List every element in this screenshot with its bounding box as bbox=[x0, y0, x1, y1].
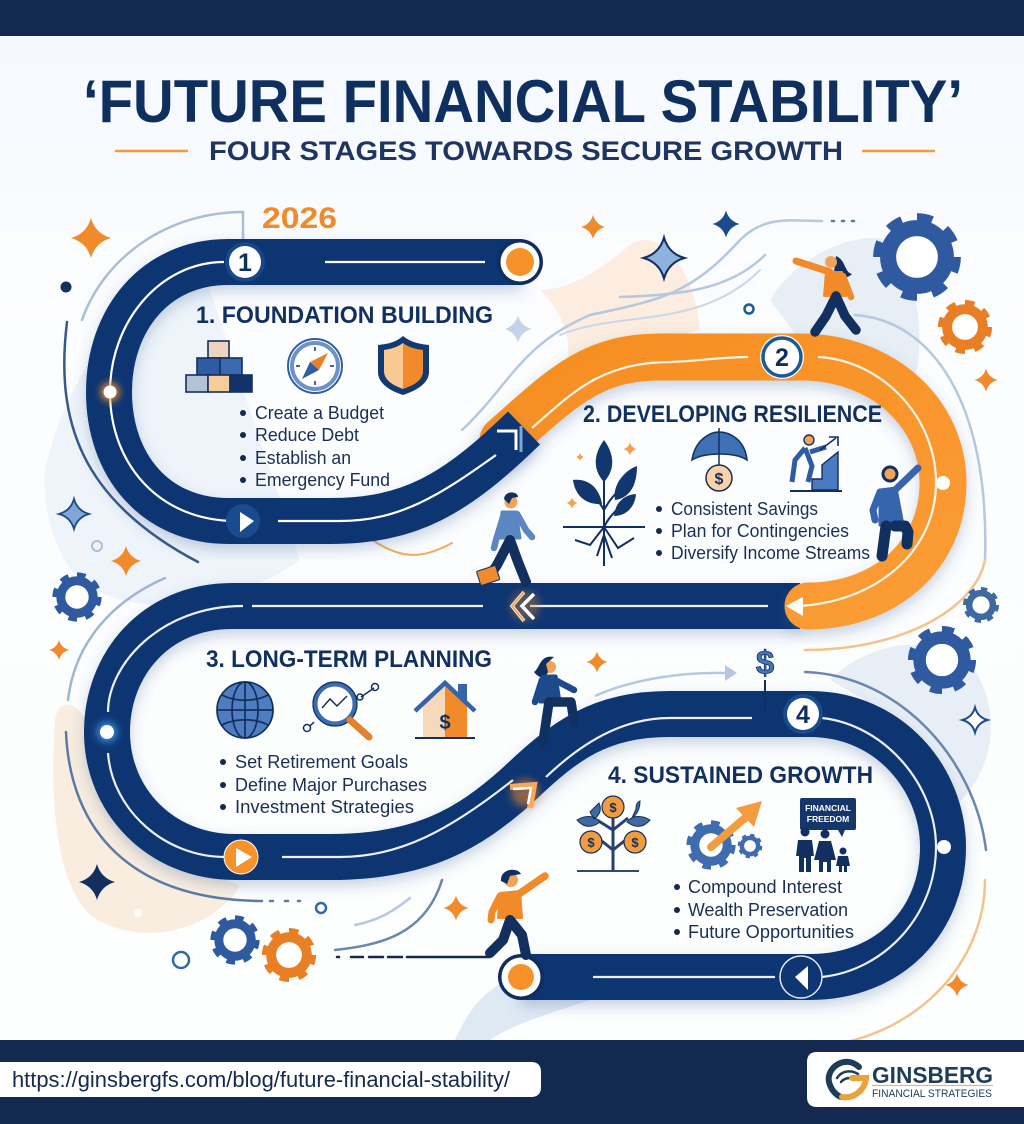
bullet list: stage 3 bbox=[220, 752, 427, 817]
top band bbox=[0, 0, 1024, 36]
gears bbox=[56, 220, 996, 978]
bottom band bbox=[0, 1040, 1024, 1124]
heading: 2026: 2026 bbox=[262, 202, 337, 235]
heading: stage 3: 3. LONG-TERM PLANNING bbox=[206, 646, 492, 673]
title: ‘FUTURE FINANCIAL STABILITY’ bbox=[83, 68, 963, 135]
bullet list: stage 2 bbox=[656, 499, 870, 563]
icon: house with dollar: $ bbox=[439, 712, 451, 734]
url pill: https://ginsbergfs.com/blog/future-financial-stability/ bbox=[12, 1067, 511, 1092]
bullet list: stage 1: Establish an bbox=[255, 448, 351, 468]
stage 1 content bbox=[186, 302, 493, 490]
bullet list: stage 3: Define Major Purchases bbox=[235, 775, 427, 795]
icon: umbrella with dollar: $ bbox=[715, 471, 724, 488]
bullet list: stage 4: Future Opportunities bbox=[688, 922, 854, 942]
subtitle: FOUR STAGES TOWARDS SECURE GROWTH bbox=[209, 136, 843, 166]
play arrow marker bbox=[226, 504, 260, 538]
bullet list: stage 4: Wealth Preservation bbox=[688, 900, 848, 920]
icon: compass bbox=[288, 339, 342, 393]
icon: umbrella with dollar bbox=[692, 428, 747, 491]
play arrow marker bbox=[224, 840, 258, 874]
bullet list: stage 1: Emergency Fund bbox=[255, 470, 390, 490]
road: stage 2 (orange) bbox=[503, 335, 950, 616]
bullet list: stage 2: Diversify Income Streams bbox=[671, 543, 870, 563]
waypoint bbox=[937, 840, 951, 854]
bullet list: stage 4 bbox=[674, 877, 854, 942]
icon: plant with roots bbox=[563, 440, 645, 566]
icon: globe bbox=[217, 682, 273, 738]
arrow toward dollar sign bbox=[595, 665, 737, 696]
logo mark bbox=[829, 1062, 866, 1097]
chevron arrow bbox=[510, 591, 540, 621]
figure: climbing woman on road 3 bbox=[534, 657, 574, 742]
icon: house with dollar bbox=[415, 683, 475, 738]
waypoint bbox=[936, 476, 950, 490]
chevron arrow bbox=[510, 779, 539, 808]
icon: family with speech bubble: FINANCIAL bbox=[805, 803, 851, 813]
decorative swoosh lines bbox=[64, 212, 986, 1048]
sparkle stars and rings bbox=[49, 210, 998, 996]
node: number 4: 4 bbox=[796, 701, 810, 729]
road: stages 3 and 4 bbox=[97, 591, 951, 1000]
icon: money tree: $ bbox=[609, 800, 617, 815]
road end marker bbox=[497, 239, 543, 285]
icon: money tree: $ bbox=[587, 835, 595, 850]
node: number 1: 1 bbox=[238, 249, 252, 277]
bullet list: stage 4: Compound Interest bbox=[688, 877, 842, 897]
bullet list: stage 1: Create a Budget bbox=[255, 403, 384, 423]
node: number 4 bbox=[783, 694, 823, 734]
figure: walking man with briefcase bbox=[476, 492, 532, 586]
bullet list: stage 3: Set Retirement Goals bbox=[235, 752, 408, 772]
figure: pointing man on road 4 bbox=[490, 870, 545, 955]
bullet list: stage 1 bbox=[240, 403, 390, 490]
figure: pointing woman on orange road bbox=[796, 256, 856, 332]
icon: family with speech bubble: FREEDOM bbox=[807, 814, 849, 824]
bullet list: stage 3: Investment Strategies bbox=[235, 797, 414, 817]
stage 3 content bbox=[206, 646, 492, 817]
icon: climber with rising arrow bbox=[790, 435, 842, 491]
icon: family with speech bubble bbox=[796, 798, 856, 872]
left arrow bbox=[786, 597, 803, 616]
chevron: road 1 to 2 bbox=[497, 426, 521, 452]
left arrow marker bbox=[780, 956, 822, 998]
dollar sign pin bbox=[756, 644, 774, 710]
icon: magnifier with chart bbox=[304, 682, 378, 737]
node: number 2 bbox=[760, 335, 804, 379]
heading: stage 2: 2. DEVELOPING RESILIENCE bbox=[583, 401, 882, 428]
soft background blobs bbox=[45, 238, 991, 1040]
heading: stage 4: 4. SUSTAINED GROWTH bbox=[608, 762, 873, 789]
icon: gears with arrow bbox=[690, 801, 762, 866]
glowing waypoint bbox=[97, 722, 117, 742]
icon: money tree bbox=[577, 796, 650, 871]
icon: shield bbox=[378, 336, 429, 395]
stage 4 content bbox=[577, 762, 873, 942]
logo: GINSBERG bbox=[872, 1062, 993, 1088]
dollar sign pin: $ bbox=[756, 644, 774, 681]
stage 2 content bbox=[563, 401, 882, 566]
figure: climbing man at orange road bbox=[873, 467, 918, 556]
road: stage 1 bbox=[101, 239, 543, 538]
bullet list: stage 2: Plan for Contingencies bbox=[671, 521, 849, 541]
bullet list: stage 2: Consistent Savings bbox=[671, 499, 818, 519]
logo: FINANCIAL STRATEGIES bbox=[872, 1088, 992, 1100]
node: number 2: 2 bbox=[775, 344, 789, 372]
road end marker bbox=[498, 954, 544, 1000]
node: number 1 bbox=[225, 242, 265, 282]
icon: money tree: $ bbox=[631, 835, 639, 850]
glowing waypoint bbox=[101, 383, 119, 401]
url pill bbox=[0, 1062, 541, 1097]
heading: stage 1: 1. FOUNDATION BUILDING bbox=[196, 302, 493, 329]
icon: building blocks bbox=[186, 341, 252, 392]
bullet list: stage 1: Reduce Debt bbox=[255, 425, 359, 445]
logo bbox=[807, 1052, 1024, 1107]
